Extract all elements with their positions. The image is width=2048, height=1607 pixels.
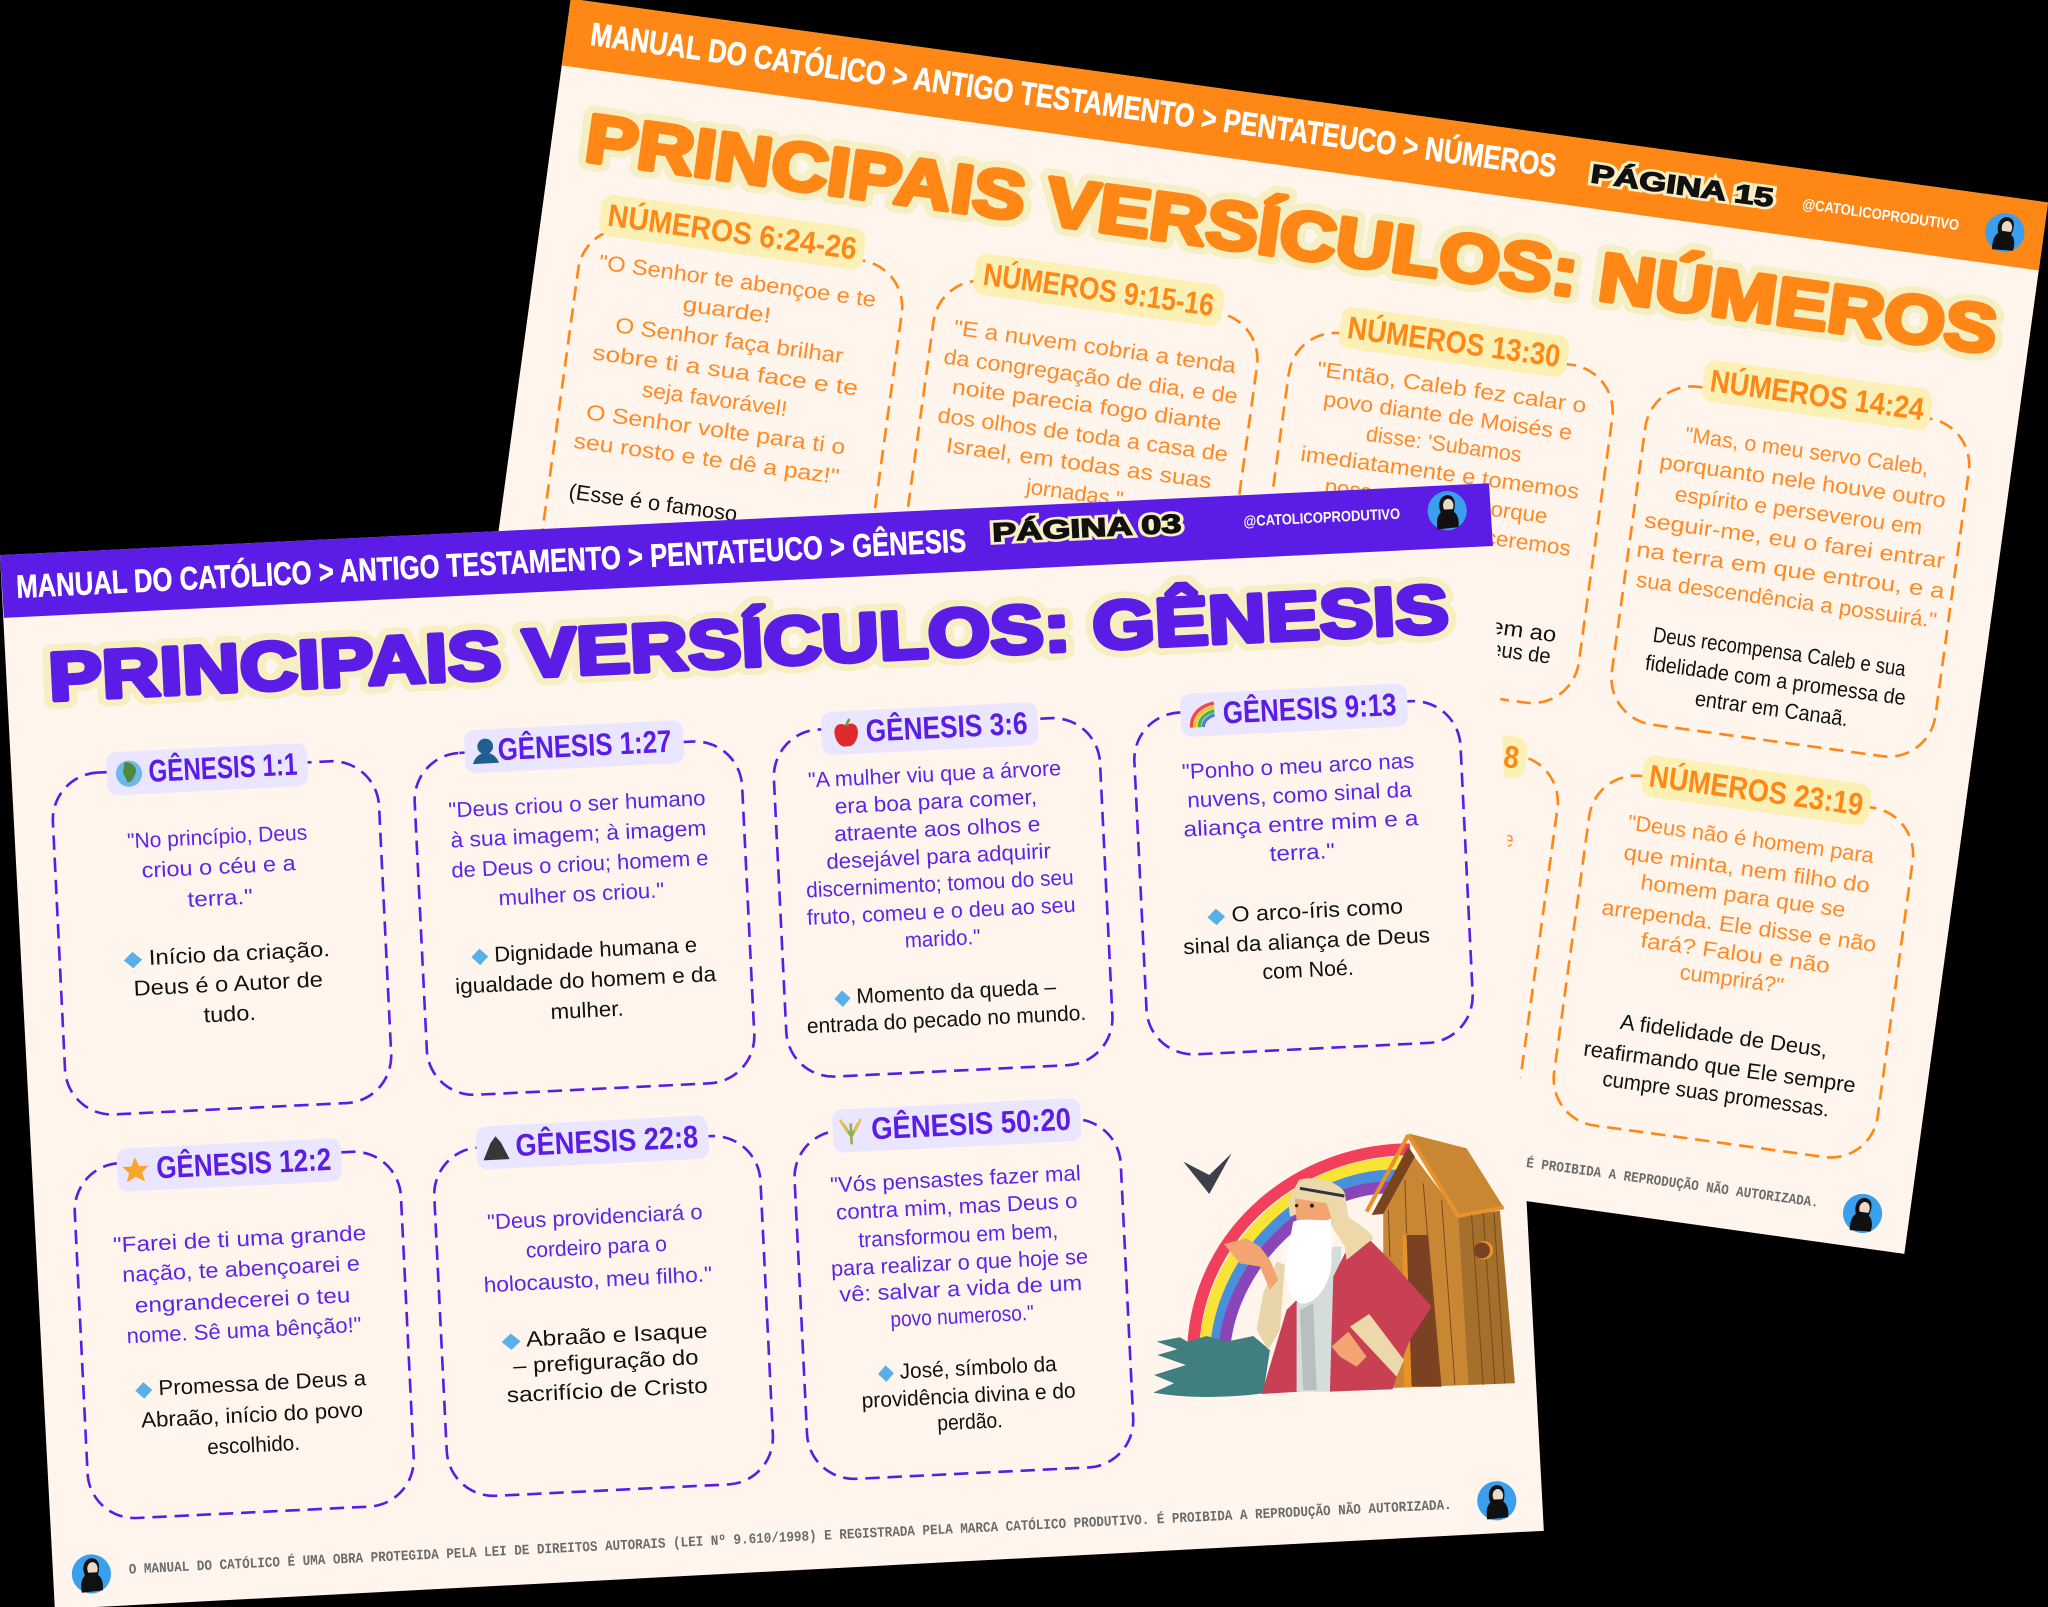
page sheet: Números	[428, 0, 2048, 1254]
icon: bird	[1183, 1153, 1232, 1194]
label: Números 9:15-16: NÚMEROS 9:15-16	[981, 256, 1216, 323]
note text	[1640, 621, 1911, 739]
icon: avatar footer right	[1476, 1480, 1517, 1521]
title: Gênesis: PRINCIPAIS VERSÍCULOS: GÊNESIS	[47, 570, 1450, 715]
icon: apple	[834, 718, 859, 747]
verse text: posse da terra, porque	[1323, 473, 1549, 528]
note text: igualdade do homem e da	[454, 961, 717, 999]
verse text	[926, 314, 1243, 525]
verse text: à sua imagem; à imagem	[450, 815, 707, 853]
verse text: "Deus não é homem para	[1626, 810, 1876, 868]
verse text: era boa para comer,	[834, 784, 1038, 819]
verse text: O Senhor faça brilhar	[614, 312, 845, 368]
verse text: na terra em que entrou, e a	[1635, 536, 1946, 603]
verse text: transformou em bem,	[858, 1218, 1059, 1252]
verse text	[1180, 748, 1420, 870]
note text: ◆ O arco-íris como	[1207, 893, 1404, 928]
panel: Gênesis 9:13	[1131, 681, 1475, 1057]
note text: ◆ Momento da queda –	[834, 974, 1057, 1010]
label: Gênesis 22:8: GÊNESIS 22:8	[515, 1118, 699, 1163]
verse text: "Deus providenciará o	[487, 1199, 703, 1234]
verse text: discernimento; tomou do seu	[806, 864, 1074, 902]
note text	[501, 1318, 711, 1408]
verse text: "A mulher viu que a árvore	[807, 755, 1062, 793]
icon: rainbow	[1190, 703, 1215, 728]
note text: ◆ Promessa de Deus a	[134, 1365, 367, 1401]
verse text	[1291, 356, 1593, 561]
header bar: Gênesis	[0, 483, 1493, 618]
note text	[1578, 1005, 1862, 1125]
label: Gênesis 3:6	[820, 702, 1039, 755]
verse text: O Senhor volte para ti o	[585, 399, 847, 459]
label: Gênesis 9:13	[1179, 683, 1409, 737]
note text: A fidelidade de Deus,	[1619, 1009, 1829, 1062]
panel: Gênesis 22:8	[431, 1113, 775, 1498]
note text	[134, 1365, 370, 1463]
verse text: seguir-me, eu o farei entrar	[1643, 507, 1946, 573]
label: Gênesis 1:1	[106, 743, 309, 796]
verse text: certamente prevaleceremos	[1292, 498, 1572, 561]
verse text: noite parecia fogo diante	[951, 374, 1223, 435]
title: Números: PRINCIPAIS VERSÍCULOS: NÚMEROS	[581, 100, 2002, 369]
label: Números 23:19: NÚMEROS 23:19	[1647, 757, 1865, 822]
note text: sinal da aliança de Deus	[1183, 922, 1430, 959]
verse text: terra."	[187, 884, 253, 912]
note text: ◆ José, símbolo da	[877, 1351, 1057, 1385]
panel: back page Números	[428, 0, 2048, 1254]
verse text: "Então, Caleb fez calar o	[1315, 356, 1588, 418]
verse text: guarde!	[681, 291, 773, 328]
verse text: homem para que se	[1639, 869, 1847, 922]
note text	[123, 936, 333, 1031]
breadcrumb: Números: MANUAL DO CATÓLICO > ANTIGO TESTAMENTO > PENTATEUCO > NÚMEROS	[588, 15, 1559, 184]
icon: avatar footer orange	[1840, 1191, 1885, 1235]
verse text	[1593, 808, 1890, 1010]
verse text	[1631, 417, 1963, 633]
icon: avatar footer left	[71, 1553, 112, 1594]
illustration: Noah, rainbow and ark	[1153, 1133, 1515, 1397]
verse text: marido."	[904, 924, 981, 953]
verse text: "No princípio, Deus	[126, 820, 308, 853]
note text: ◆ Início da criação.	[123, 936, 330, 971]
page number 15	[1589, 158, 1776, 213]
verse text: seja favorável!	[641, 377, 789, 421]
note text: Abraão, início do povo	[141, 1397, 364, 1433]
note text: mulher.	[550, 996, 624, 1024]
icon: avatar header orange	[1983, 210, 2027, 255]
verse text: seu rosto e te dê a paz!"	[572, 428, 841, 489]
verse text: aliança entre mim e a	[1183, 805, 1419, 842]
note text: (Esse é o famoso	[567, 479, 739, 526]
verse text: Israel, em todas as suas	[945, 432, 1213, 493]
label: Números 13:30: NÚMEROS 13:30	[1345, 309, 1563, 374]
panel: Números 9:15-16	[892, 248, 1267, 671]
note text	[805, 972, 1087, 1038]
verse text: cordeiro para o	[525, 1231, 667, 1263]
verse text: porquanto nele houve outro	[1658, 449, 1948, 513]
verse text: cumprirá?"	[1678, 959, 1785, 998]
water	[1153, 1336, 1270, 1397]
verse text: dos olhos de toda a casa de	[936, 402, 1229, 467]
verse text: espírito e perseverou em	[1673, 481, 1924, 540]
note text: – prefiguração do	[513, 1344, 699, 1378]
note text: entrar em Canaã.	[1694, 686, 1850, 731]
note text: tudo.	[203, 1000, 256, 1027]
verse text: fará? Falou e não	[1639, 927, 1831, 978]
verse text: contra mim, mas Deus o	[835, 1188, 1078, 1225]
verse text: desejável para adquirir	[826, 838, 1051, 874]
verse text: "Mas, o meu servo Caleb,	[1684, 422, 1930, 480]
label: Números 6:24-26: NÚMEROS 6:24-26	[606, 197, 859, 266]
label: Gênesis 9:13: GÊNESIS 9:13	[1222, 686, 1397, 730]
note text: sacrifício de Cristo	[506, 1373, 708, 1407]
verse text: vê: salvar a vida de um	[839, 1270, 1083, 1307]
title: Gênesis: PRINCIPAIS VERSÍCULOS: GÊNESIS	[47, 570, 1450, 715]
label: Números 14:24: NÚMEROS 14:24	[1708, 362, 1927, 427]
verse text: engrandecerei o teu	[134, 1282, 351, 1318]
note text: perdão.	[937, 1407, 1003, 1435]
verse text: nome. Sê uma bênção!"	[126, 1312, 362, 1348]
verse text: "O Senhor te abençoe e te	[597, 249, 878, 312]
label: Gênesis 12:2	[116, 1138, 343, 1192]
label: Gênesis 50:20: GÊNESIS 50:20	[870, 1101, 1072, 1146]
label: Gênesis 50:20	[832, 1098, 1082, 1153]
verse text: sua descendência a possuirá."	[1635, 567, 1938, 633]
note text: ◆ Abraão e Isaque	[501, 1318, 708, 1353]
label: Números 22:18: NÚMEROS 22:18	[1303, 711, 1521, 776]
verse text	[826, 1160, 1091, 1335]
verse text: holocausto, meu filho."	[483, 1261, 713, 1297]
panel: Gênesis 1:1	[50, 739, 393, 1117]
note text	[1280, 585, 1558, 669]
note text: fidelidade com a promessa de	[1644, 650, 1907, 710]
verse text: imediatamente e tomemos	[1299, 441, 1581, 504]
note text	[1181, 892, 1432, 988]
ark hut	[1367, 1133, 1515, 1388]
icon: avatar header purple	[1427, 490, 1468, 531]
page number 03: PÁGINA 03	[991, 508, 1182, 547]
verse text	[800, 755, 1078, 957]
panel: Números 13:30	[1249, 300, 1622, 709]
label: Gênesis 1:1: GÊNESIS 1:1	[148, 746, 298, 789]
verse text	[480, 1199, 713, 1297]
label: Gênesis 22:8	[475, 1115, 710, 1170]
note text: providência divina e do	[861, 1377, 1076, 1413]
panel: Gênesis 1:27	[411, 717, 757, 1097]
verse text: terra."	[1269, 838, 1335, 866]
page sheet: Gênesis	[0, 483, 1544, 1607]
page number 03: PÁGINA 03	[991, 508, 1182, 547]
verse text: "Vós pensastes fazer mal	[830, 1160, 1081, 1197]
footer: Números: O MANUAL DO CATÓLICO É UMA OBRA PROTEGIDA PELA LEI DE DIREITOS AUTORAIS (LEI Nº 9.610/1998) E REGISTRADA PELA MARCA CATÓLICO PRODUTIVO. É PROIBIDA A REPRODUÇÃO NÃO AUTORIZADA.	[505, 1014, 1820, 1212]
panel: Números 23:19	[1548, 748, 1922, 1163]
verse text: para realizar o que hoje se	[830, 1243, 1089, 1281]
icon: wheat	[840, 1119, 862, 1145]
verse text: de Deus o criou; homem e	[451, 845, 709, 883]
label: Gênesis 3:6: GÊNESIS 3:6	[865, 705, 1028, 749]
verse text: "Deus criou o ser humano	[448, 785, 706, 823]
handle: @CATOLICOPRODUTIVO	[1243, 506, 1401, 530]
note text: cumpre suas promessas.	[1601, 1066, 1831, 1122]
verse text: nuvens, como sinal da	[1187, 777, 1412, 813]
note text: ◆ Dignidade humana e	[471, 932, 698, 968]
note text: escolhido.	[207, 1430, 300, 1459]
verse text: nação, te abençoarei e	[122, 1250, 360, 1287]
page number 03	[991, 508, 1182, 547]
icon: person	[472, 738, 499, 764]
verse text: mulher os criou."	[498, 877, 665, 910]
handle: @CATOLICOPRODUTIVO	[1801, 196, 1960, 234]
verse text: "Ponho o meu arco nas	[1181, 748, 1415, 784]
note text	[860, 1350, 1077, 1439]
note text: reafirmando que Ele sempre	[1582, 1036, 1857, 1098]
page number 15: PÁGINA 15	[1589, 158, 1776, 213]
verse text	[448, 785, 710, 913]
verse text: atraente aos olhos e	[834, 811, 1041, 846]
panel: Gênesis 3:6	[771, 699, 1115, 1079]
breadcrumb: Gênesis: MANUAL DO CATÓLICO > ANTIGO TESTAMENTO > PENTATEUCO > GÊNESIS	[15, 522, 967, 605]
note text: Deus é o Autor de	[133, 967, 323, 1001]
verse text: "Farei de ti uma grande	[112, 1220, 367, 1257]
verse text: criou o céu e a	[141, 850, 296, 883]
verse text: disse: 'Subamos	[1365, 421, 1523, 467]
verse text: sobre ti a sua face e te	[591, 339, 860, 400]
note text: com Noé.	[1262, 955, 1354, 984]
panel: Números 6:24-26	[536, 191, 912, 619]
note text: Deus recompensa Caleb e sua	[1652, 622, 1907, 681]
note text: entrada do pecado no mundo.	[806, 1000, 1087, 1038]
label: Gênesis 1:27	[464, 720, 685, 774]
verse text	[126, 820, 311, 915]
note text	[453, 931, 718, 1029]
icon: mountain	[482, 1136, 510, 1160]
header bar: Números	[562, 0, 2048, 270]
verse text: jornadas."	[1024, 473, 1125, 512]
Noah figure	[1224, 1178, 1432, 1394]
panel: Números 14:24	[1605, 352, 1979, 763]
note text: confiar na palavra de Deus de	[1282, 607, 1552, 669]
footer: Gênesis: O MANUAL DO CATÓLICO É UMA OBRA PROTEGIDA PELA LEI DE DIREITOS AUTORAIS (LEI Nº 9.610/1998) E REGISTRADA PELA MARCA CATÓLICO PRODUTIVO. É PROIBIDA A REPRODUÇÃO NÃO AUTORIZADA.	[128, 1496, 1452, 1579]
verse text: arrependa. Ele disse e não	[1600, 894, 1878, 957]
verse fragment: Ainda que Balaque me desse e	[1279, 795, 1515, 852]
verse text: fruto, comeu e o deu ao seu	[806, 892, 1076, 930]
verse text: povo numeroso."	[890, 1300, 1034, 1332]
note text: Caleb mostra coragem ao	[1283, 585, 1558, 647]
page number 15: PÁGINA 15	[1589, 158, 1776, 213]
verse text: "E a nuvem cobria a tenda	[952, 315, 1238, 378]
icon: star	[122, 1157, 149, 1183]
verse text: povo diante de Moisés e	[1322, 386, 1574, 445]
verse text	[572, 249, 878, 491]
panel: Números 22:18	[1192, 699, 1566, 1114]
title: Números: PRINCIPAIS VERSÍCULOS: NÚMEROS	[581, 100, 2002, 369]
verse text	[112, 1220, 371, 1349]
label: Gênesis 12:2: GÊNESIS 12:2	[155, 1141, 332, 1185]
panel: front page Gênesis	[0, 483, 1544, 1607]
verse text: que minta, nem filho do	[1622, 839, 1871, 898]
panel: Gênesis 12:2	[72, 1135, 416, 1520]
panel: Gênesis 50:20	[791, 1096, 1135, 1481]
verse text: da congregação de dia, e de	[942, 344, 1239, 409]
label: Gênesis 1:27: GÊNESIS 1:27	[497, 723, 672, 767]
icon: globe	[115, 760, 143, 787]
rainbow	[1193, 1149, 1410, 1345]
